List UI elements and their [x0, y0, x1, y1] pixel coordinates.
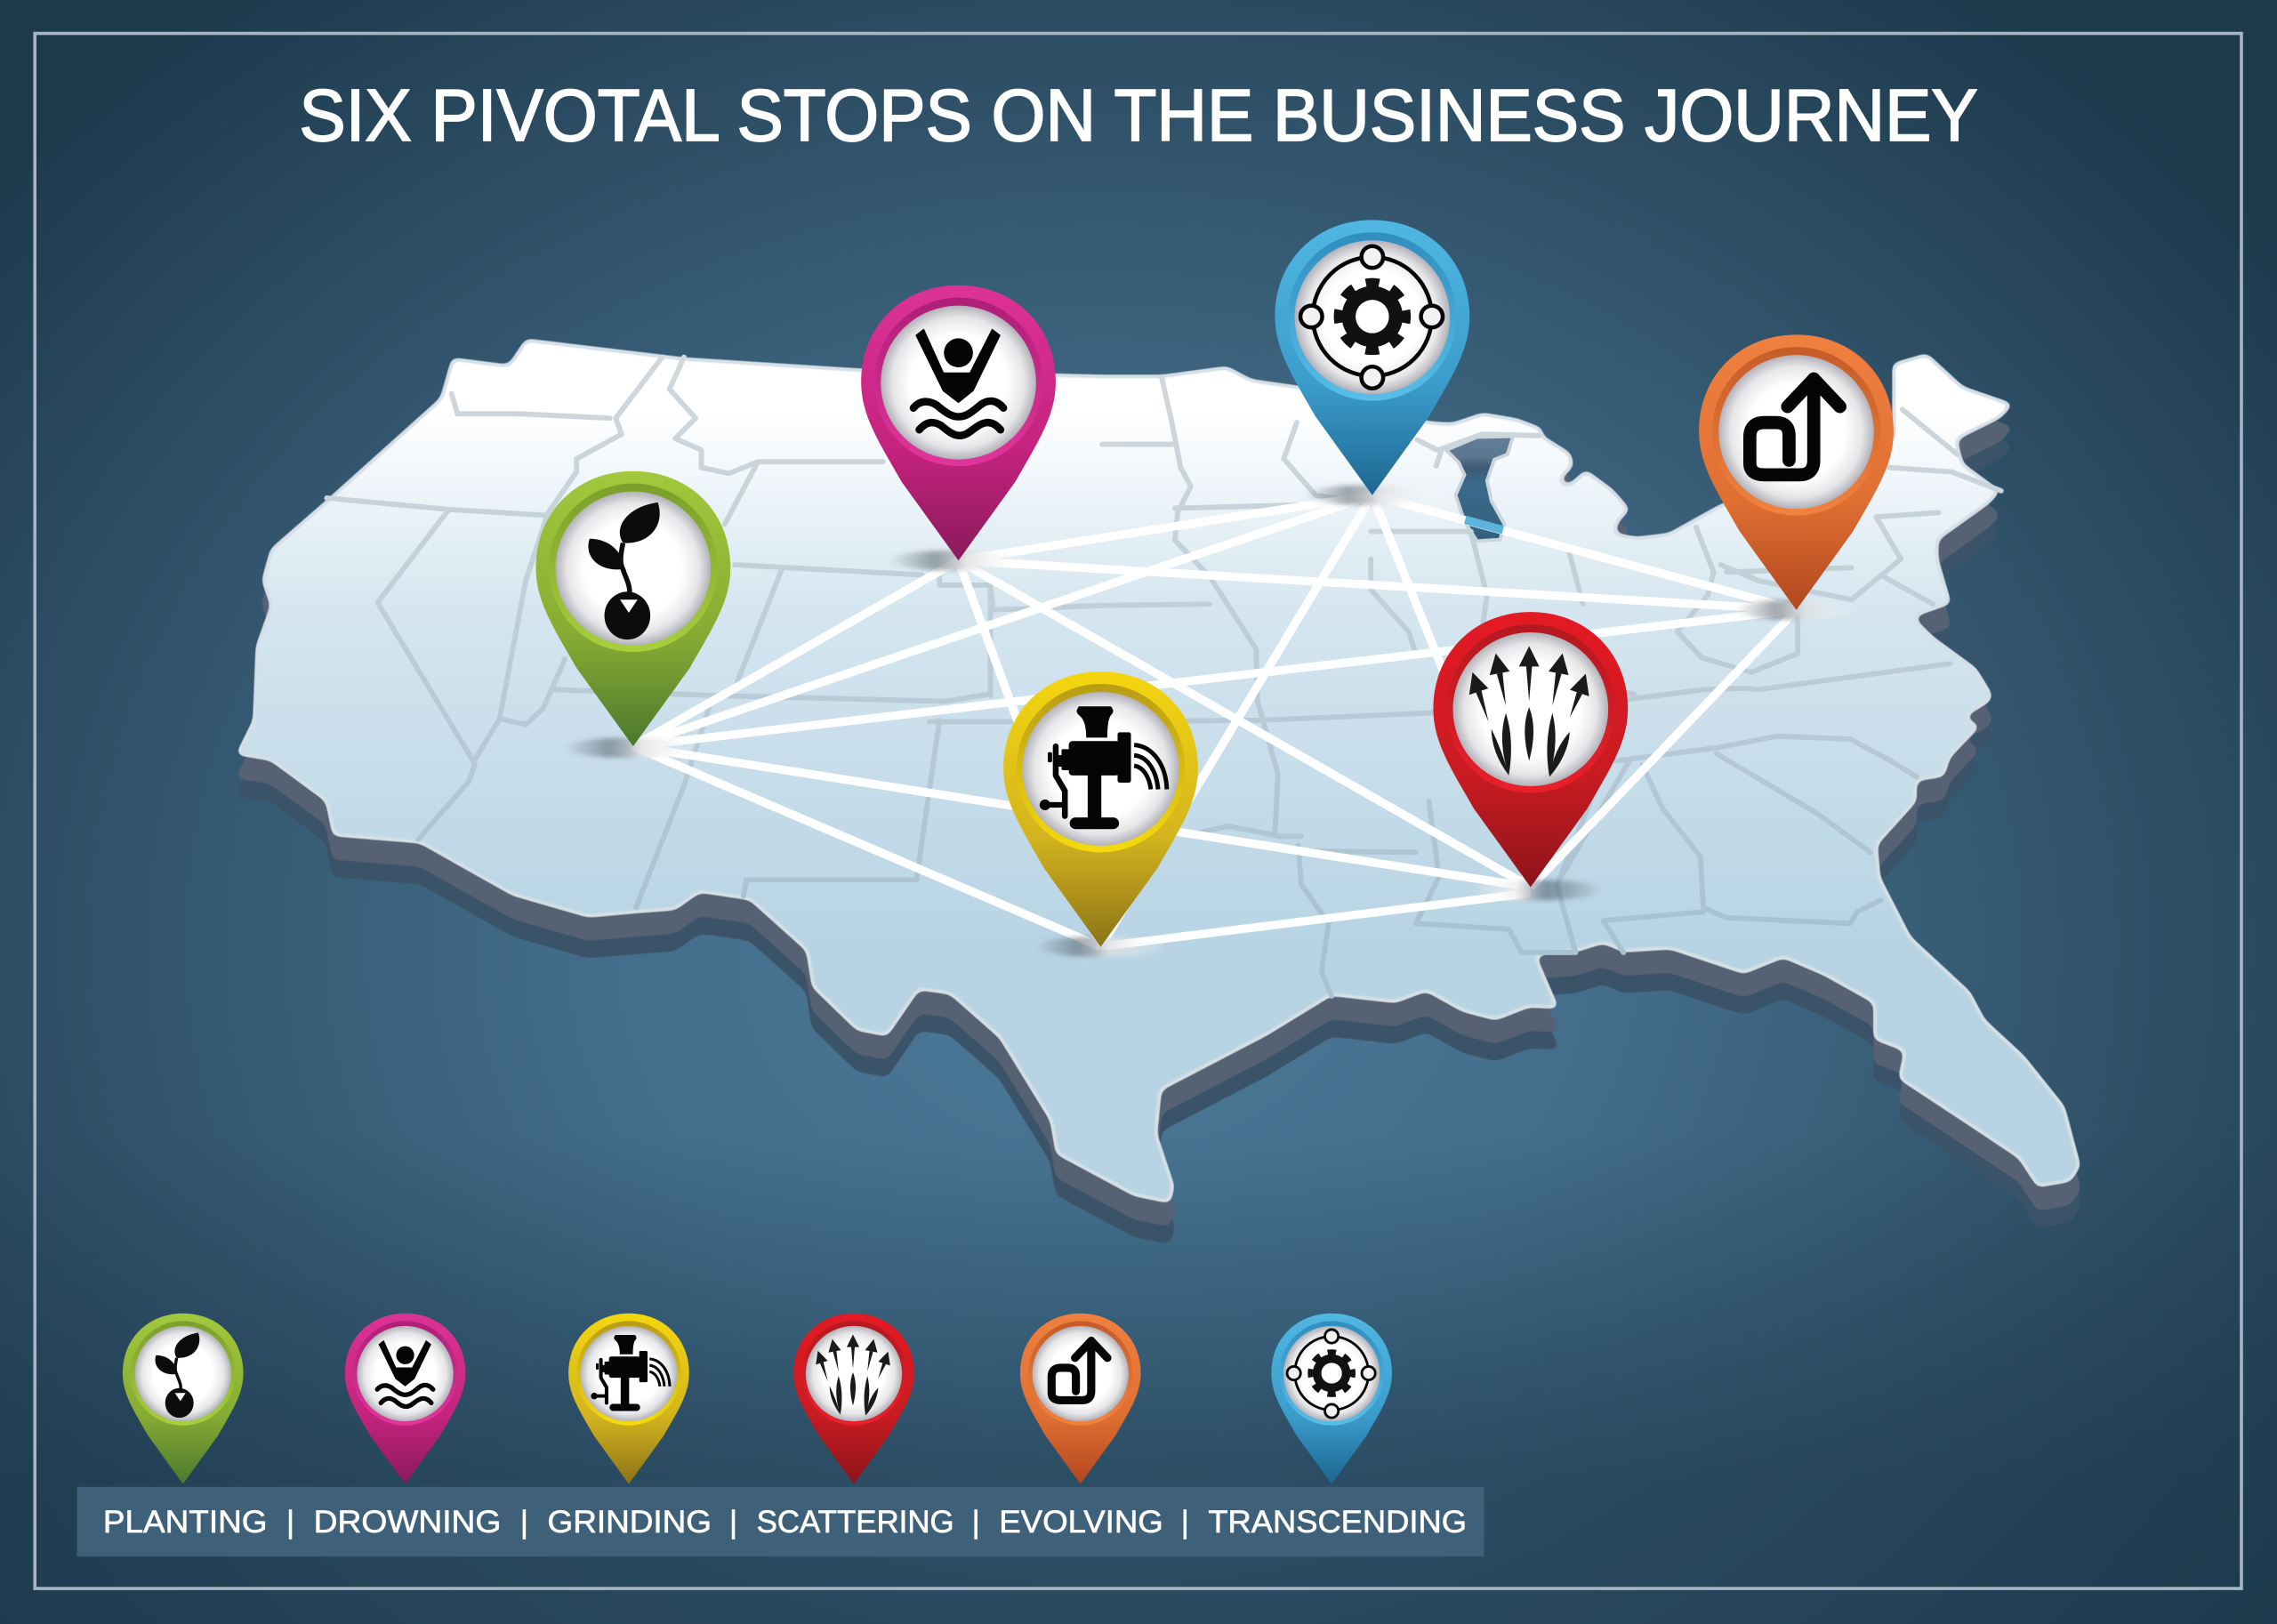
map surface [236, 338, 2081, 1203]
title: SIX PIVOTAL STOPS ON THE BUSINESS JOURNEY [299, 75, 1978, 157]
pin: planting (green) [535, 471, 730, 746]
legend labels: TRANSCENDING [1208, 1505, 1467, 1540]
legend pin: drowning [345, 1314, 465, 1484]
map: United States [236, 338, 2081, 1244]
state borders [326, 358, 2001, 996]
legend pin: evolving [1020, 1314, 1141, 1484]
legend bar [77, 1487, 1484, 1556]
pin: evolving (orange) [1699, 334, 1894, 610]
legend pin: planting [123, 1314, 244, 1484]
legend labels: DROWNING [314, 1505, 501, 1540]
legend labels: SCATTERING [757, 1505, 954, 1540]
pin: scattering (red) [1433, 612, 1628, 888]
pin shadows [563, 485, 1857, 957]
legend [77, 1314, 1484, 1556]
pin: transcending (blue) [1275, 220, 1469, 495]
legend labels [103, 1505, 1467, 1540]
legend pin: transcending [1271, 1314, 1392, 1484]
legend labels: | [286, 1505, 294, 1540]
legend labels: PLANTING [103, 1505, 267, 1540]
legend pin: grinding [568, 1314, 689, 1484]
legend labels: EVOLVING [999, 1505, 1163, 1540]
legend labels: GRINDING [548, 1505, 712, 1540]
pin: drowning (magenta) [861, 285, 1056, 560]
pin: grinding (yellow) [1003, 671, 1198, 946]
legend labels: | [729, 1505, 737, 1540]
legend labels: | [972, 1505, 980, 1540]
legend labels: | [520, 1505, 528, 1540]
map extrusion [236, 362, 2081, 1244]
connection lines [633, 495, 1797, 946]
Lake Michigan [1446, 437, 1513, 541]
legend pin: scattering [793, 1314, 914, 1484]
legend labels: | [1181, 1505, 1189, 1540]
